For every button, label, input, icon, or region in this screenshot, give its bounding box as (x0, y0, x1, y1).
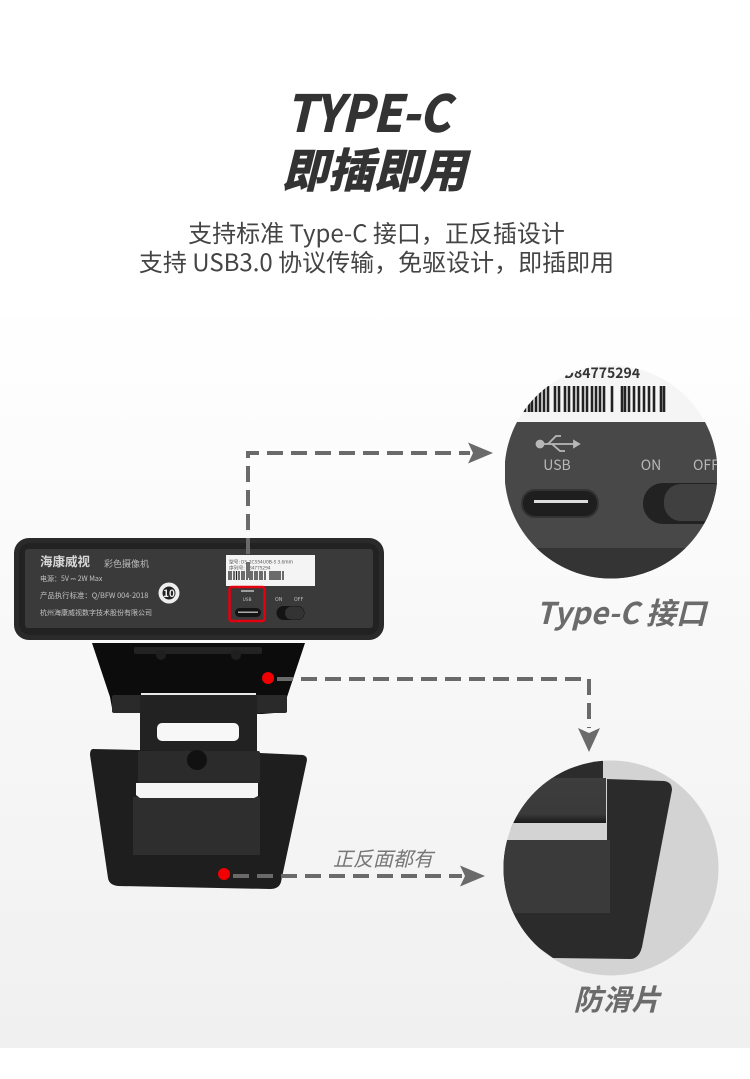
slot (508, 823, 603, 838)
background panel (0, 300, 750, 1048)
red dot: clip (262, 672, 274, 684)
plate (500, 779, 672, 959)
detail circle: grip pad (500, 755, 719, 977)
detail off label: OFF (693, 455, 719, 475)
both sides label: 正反面都有 (333, 843, 436, 872)
subtitle text: 支持标准 Type-C 接口，正反插设计 (188, 214, 565, 249)
bracket (140, 695, 257, 752)
recess (133, 797, 260, 855)
label: type-c port: Type-C 接口 (536, 589, 709, 633)
switch labels (275, 596, 303, 603)
red highlight box (230, 587, 264, 621)
switch labels: ON (275, 596, 283, 603)
camera stand (90, 643, 307, 889)
lower plate (90, 749, 307, 889)
barcode (229, 571, 283, 580)
switch (276, 606, 304, 620)
top dark arm (510, 760, 603, 830)
detail switch (643, 483, 717, 524)
panel text (40, 551, 152, 618)
plate white slot (136, 783, 258, 798)
type-c port (235, 608, 261, 617)
clip screws (156, 650, 241, 660)
hinge section (513, 778, 606, 823)
back panel (25, 549, 373, 628)
detail on label: ON (641, 455, 661, 475)
detail circle: type-c port (505, 363, 734, 582)
title: TYPE-C (286, 74, 456, 146)
recess (500, 840, 610, 913)
subtitle text (139, 214, 614, 278)
product name: 彩色摄像机 (104, 557, 149, 570)
subtitle text: 支持 USB3.0 协议传输，免驱设计，即插即用 (139, 243, 614, 278)
white slit (141, 693, 256, 695)
arrow: usb to detail (248, 442, 493, 578)
clip ridge (134, 647, 262, 654)
brand text: 海康威视 (40, 551, 91, 570)
screw hole (187, 750, 207, 770)
label: grip pad: 防滑片 (573, 977, 662, 1019)
detail usb label: USB (543, 455, 571, 475)
standard spec: 产品执行标准：Q/BFW 004-2018 (40, 590, 148, 601)
detail port (522, 490, 598, 517)
power spec: 电源：5V ⎓ 2W Max (40, 574, 103, 584)
arrow: clip to detail (277, 679, 600, 752)
detail usb icon (536, 436, 579, 451)
10 year badge: 10 (163, 585, 175, 600)
bracket hole (157, 723, 239, 741)
usb icon (241, 590, 254, 592)
detail serial number: D84775294 (564, 363, 640, 383)
switch labels: OFF (294, 596, 303, 603)
title: 即插即用 (282, 135, 471, 201)
camera body (14, 538, 384, 640)
arrow: plate to detail (233, 866, 485, 886)
serial label (226, 555, 315, 586)
detail barcode (525, 386, 664, 412)
hinge (112, 695, 287, 713)
serial label: 序列号: D84775294 (229, 564, 271, 572)
company: 杭州海康威视数字技术股份有限公司 (40, 608, 152, 618)
usb label: USB (243, 597, 251, 603)
10 year badge (158, 582, 180, 604)
serial label: 型号: DS-2CS54U0B-S 3.6mm (229, 558, 294, 566)
red dot: plate (218, 868, 230, 880)
title (282, 74, 471, 201)
upper clip (92, 643, 305, 714)
neck (138, 751, 260, 783)
